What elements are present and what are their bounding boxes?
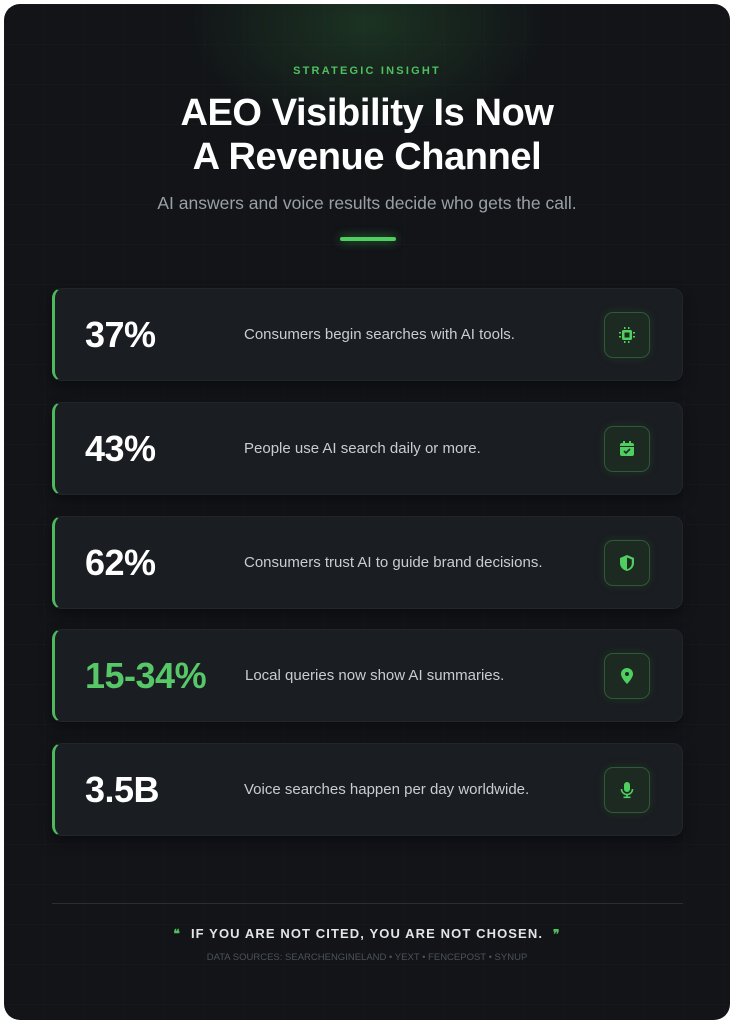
icon: mic: [604, 767, 650, 813]
card: 43%: People use AI search daily or more.: [244, 440, 481, 457]
icon: pin: [604, 653, 650, 699]
card: 62%: Consumers trust AI to guide brand decisions.: [244, 554, 542, 571]
card: 37%: 37%: [85, 314, 156, 355]
card: 3.5B: [52, 743, 683, 836]
icon: shield: [604, 540, 650, 586]
card: 15-34%: 15-34%: [85, 655, 206, 696]
card: 37%: [52, 288, 683, 381]
card: 3.5B: 3.5B: [85, 769, 159, 810]
card: 3.5B: Voice searches happen per day worldwide.: [244, 781, 529, 798]
card: 15-34%: Local queries now show AI summaries.: [245, 667, 504, 684]
card: 43%: [52, 402, 683, 495]
card: 15-34%: [52, 629, 683, 722]
card: 43%: 43%: [85, 428, 156, 469]
card: 62%: [52, 516, 683, 609]
accent bar: [340, 237, 396, 241]
subtitle: AI answers and voice results decide who gets the call.: [157, 193, 577, 213]
card: 62%: 62%: [85, 542, 156, 583]
title: [180, 92, 554, 178]
title: A Revenue Channel: [193, 136, 541, 178]
icon: chip: [604, 312, 650, 358]
title: AEO Visibility Is Now: [180, 92, 554, 134]
data sources: DATA SOURCES: SEARCHENGINELAND • YEXT • FENCEPOST • SYNUP: [207, 952, 527, 963]
quote: ❝ IF YOU ARE NOT CITED, YOU ARE NOT CHOSEN. ❞: [173, 926, 561, 941]
icon: calendar: [604, 426, 650, 472]
card: 37%: Consumers begin searches with AI tools.: [244, 326, 515, 343]
kicker: STRATEGIC INSIGHT: [293, 65, 441, 77]
